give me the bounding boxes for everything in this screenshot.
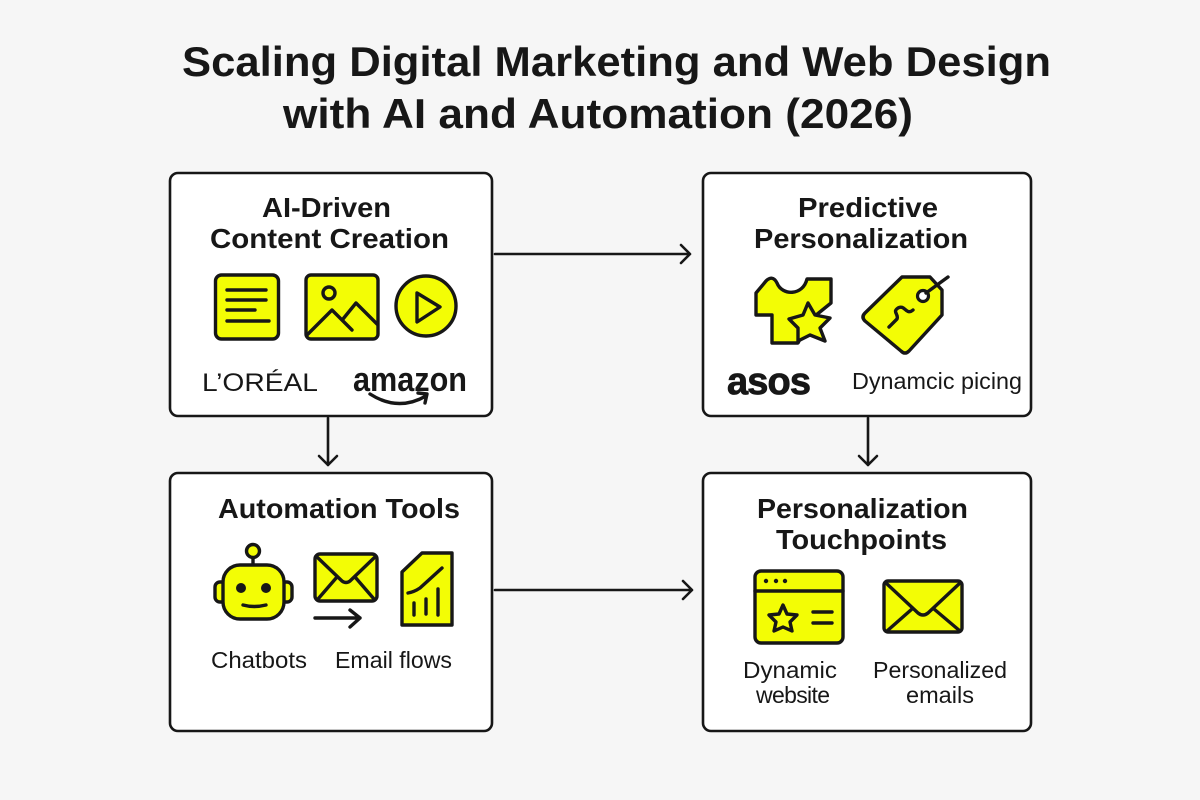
icon: dynamic website	[755, 571, 843, 643]
icon: envelope	[884, 581, 962, 632]
title: Scaling Digital Marketing and Web Design	[182, 38, 1051, 85]
arrow: predictive personalization to touchpoints	[859, 418, 877, 465]
label: email flows: Email flows	[335, 647, 452, 673]
heading: predictive personalization: Personalization	[754, 223, 968, 254]
icon: image	[306, 275, 378, 339]
label: dynamic website	[743, 657, 837, 708]
arrow: automation tools to touchpoints	[495, 581, 692, 599]
label: dynamic pricing: Dynamcic picing	[852, 368, 1022, 394]
icon: growth chart document	[402, 553, 452, 625]
heading: personalization touchpoints: Touchpoints	[776, 524, 947, 555]
heading: automation tools: Automation Tools	[218, 493, 460, 524]
icon: robot	[215, 544, 292, 619]
title: with AI and Automation (2026)	[282, 90, 913, 137]
icon: shirt with star	[756, 278, 831, 343]
heading: personalization touchpoints: Personalization	[757, 493, 968, 524]
label: chatbots: Chatbots	[211, 647, 307, 673]
icon: envelope with arrow	[315, 554, 377, 627]
icon: video play	[396, 276, 456, 336]
logo: amazon: amazon	[353, 361, 467, 399]
panel: predictive personalization	[703, 173, 1031, 416]
label: personalized emails: Personalized	[873, 657, 1007, 683]
heading: personalization touchpoints	[757, 493, 968, 555]
logo: asos: asos	[727, 361, 811, 403]
label: dynamic website: Dynamic	[743, 657, 837, 683]
panel: AI-driven content creation	[170, 173, 492, 416]
heading: AI-driven content creation: AI-Driven	[262, 192, 391, 223]
panel: automation tools	[170, 473, 492, 731]
heading: AI-driven content creation	[210, 192, 449, 254]
arrow: content creation to automation tools	[319, 418, 337, 465]
icon: document	[216, 275, 278, 339]
logo: L'Oreal: L’ORÉAL	[202, 368, 318, 397]
heading: AI-driven content creation: Content Creation	[210, 223, 449, 254]
heading: predictive personalization	[754, 192, 968, 254]
label: personalized emails	[873, 657, 1007, 708]
label: dynamic website: website	[755, 682, 830, 708]
arrow: content creation to predictive personalization	[495, 245, 690, 263]
heading: predictive personalization: Predictive	[798, 192, 938, 223]
title	[182, 38, 1051, 137]
panel: personalization touchpoints	[703, 473, 1031, 731]
label: personalized emails: emails	[906, 682, 974, 708]
icon: price tag	[863, 277, 948, 353]
